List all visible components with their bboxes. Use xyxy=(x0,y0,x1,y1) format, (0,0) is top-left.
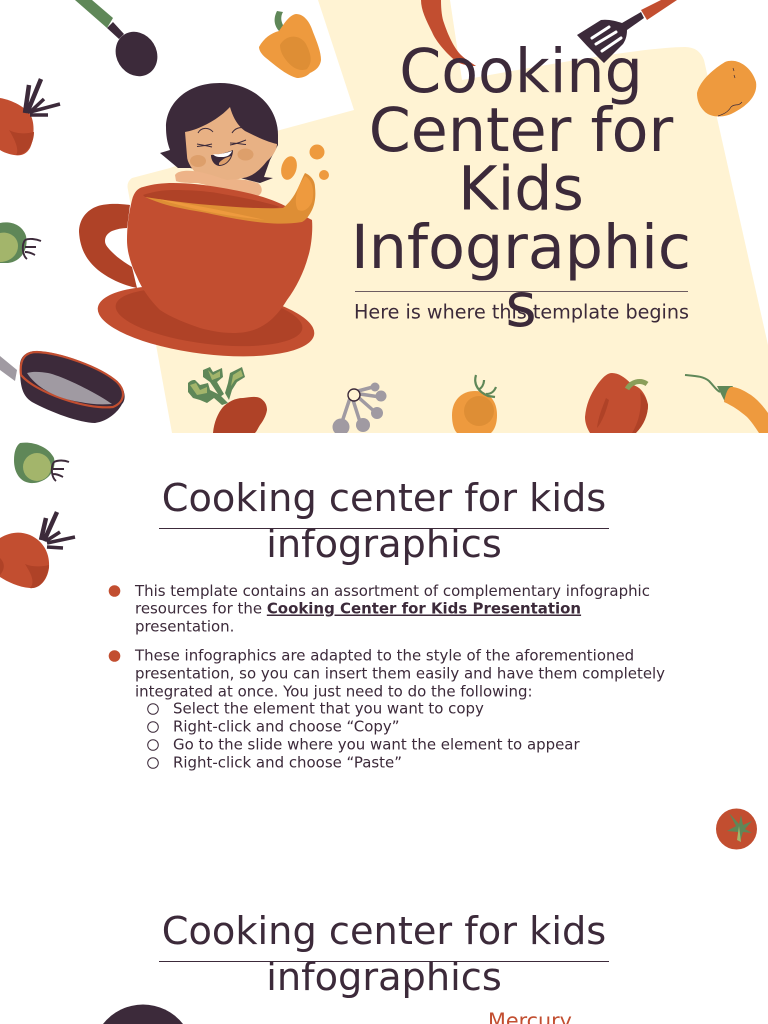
dark circle xyxy=(103,1005,183,1024)
title: Cooking xyxy=(399,37,643,107)
text block: first bullet: resources for the xyxy=(135,600,267,618)
icon: measuring spoons xyxy=(332,382,386,436)
arms xyxy=(175,171,262,196)
heading: Cooking center for kids xyxy=(162,476,606,521)
face xyxy=(185,107,277,181)
icon: spoon xyxy=(75,0,158,76)
list: steps xyxy=(148,700,580,772)
icon: beet with leaves xyxy=(188,367,267,433)
list: steps: Select the element that you want to copy xyxy=(173,700,484,718)
subtitle: Here is where this template begins xyxy=(354,300,689,324)
icon: red bell pepper xyxy=(585,373,648,433)
icon: orange bell pepper xyxy=(259,11,321,78)
second heading divider xyxy=(159,961,609,962)
title: s xyxy=(505,271,537,341)
title: Kids xyxy=(458,154,584,224)
icon: green sprout left xyxy=(0,222,41,263)
icon: spatula xyxy=(577,0,677,63)
text block: second bullet: presentation, so you can insert them easily and have them completely xyxy=(135,664,665,682)
heading: second slide: Cooking center for kids xyxy=(162,909,606,954)
icon: tomato xyxy=(716,808,757,850)
icon: red chili top xyxy=(421,0,476,66)
list: steps: Right-click and choose “Copy” xyxy=(173,718,399,736)
text block: second bullet: integrated at once. You just need to do the following: xyxy=(135,682,533,700)
text block: second bullet: These infographics are adapted to the style of the aforementioned xyxy=(134,646,634,664)
cup handle xyxy=(79,204,137,288)
text block: first bullet: presentation. xyxy=(135,618,234,636)
saucer xyxy=(98,287,314,356)
title: Center for xyxy=(369,96,673,166)
icon: potato xyxy=(697,61,756,116)
text block: second bullet xyxy=(109,646,665,700)
icon: beet left xyxy=(0,512,75,588)
soup and splash xyxy=(145,173,315,224)
icon: frying pan xyxy=(0,351,125,423)
cream cutting board background xyxy=(128,0,768,433)
heading divider xyxy=(159,528,609,529)
icon: green sprout xyxy=(14,443,69,483)
panel: cover hero xyxy=(0,0,768,436)
girl hair xyxy=(160,83,278,183)
title divider xyxy=(355,291,688,292)
cup body xyxy=(127,183,312,333)
title: Infographic xyxy=(351,213,691,283)
mouth xyxy=(211,150,233,166)
list: steps: Go to the slide where you want the element to appear xyxy=(173,736,580,754)
icon: beet top left xyxy=(0,79,60,155)
eyes and brows xyxy=(197,128,246,147)
icon: orange chili xyxy=(685,375,768,433)
cheeks xyxy=(190,155,206,167)
list: steps: Right-click and choose “Paste” xyxy=(173,754,402,772)
cup inner rim xyxy=(143,190,280,210)
text block: first bullet: This template contains an assortment of complementary infographic xyxy=(134,582,650,600)
heading: infographics xyxy=(266,522,502,567)
splash drops xyxy=(281,156,297,180)
illustration: girl in a soup cup xyxy=(79,83,329,367)
heading: second slide: infographics xyxy=(266,955,502,1000)
icon: orange tomato xyxy=(452,375,497,433)
text block: first bullet: Cooking Center for Kids Presentation xyxy=(267,600,581,618)
text block: first bullet xyxy=(109,582,650,636)
